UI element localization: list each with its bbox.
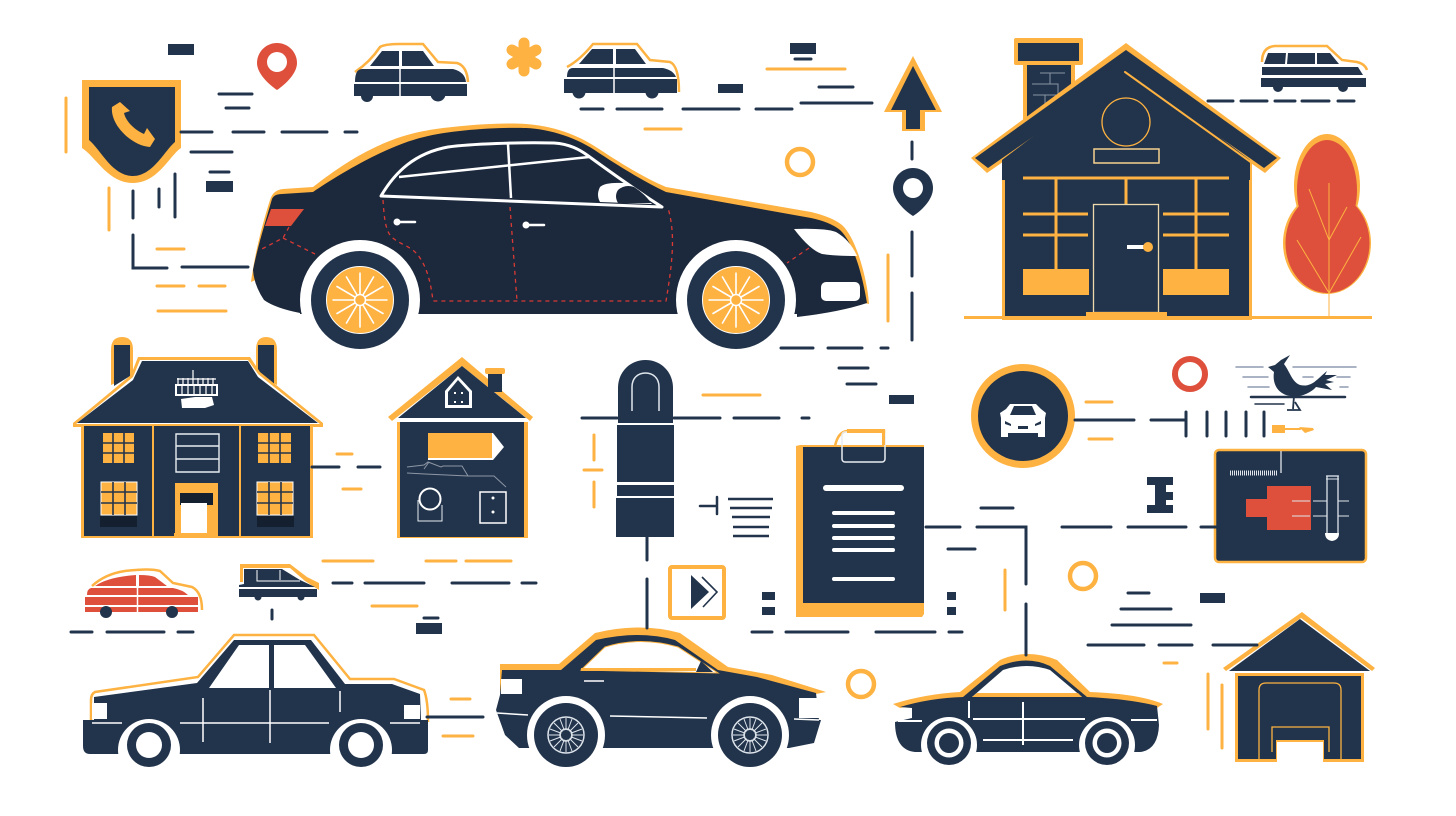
icon: red ring bbox=[1175, 359, 1205, 389]
blueprint panel bbox=[1215, 450, 1366, 562]
wheels bbox=[118, 719, 392, 781]
clipboard bbox=[796, 429, 924, 617]
windshield bbox=[972, 666, 1082, 697]
icon: red location pin bbox=[257, 43, 297, 90]
windows bbox=[209, 645, 336, 688]
icon: letter-like I block bbox=[1147, 477, 1173, 513]
window frame bars bbox=[399, 144, 589, 198]
car roof outline bbox=[251, 123, 869, 304]
door seams bbox=[260, 200, 809, 301]
windows bbox=[581, 642, 718, 673]
wall panel bbox=[480, 492, 506, 523]
windows outline bbox=[381, 143, 662, 207]
pencil bbox=[1327, 476, 1338, 536]
autumn tree bbox=[1283, 134, 1371, 317]
rear wheel bbox=[300, 240, 420, 360]
large house bbox=[964, 38, 1372, 320]
faint outline car bbox=[407, 462, 506, 487]
attic window bbox=[1102, 98, 1150, 146]
small van bbox=[239, 564, 319, 600]
mirror glass bbox=[616, 186, 651, 203]
front view car bbox=[1000, 404, 1046, 437]
orange rings bbox=[848, 563, 1096, 697]
small car: top left bbox=[354, 44, 468, 102]
clipboard text lines bbox=[826, 485, 901, 491]
icon: shield with phone bbox=[82, 80, 181, 183]
side mirror bbox=[598, 183, 652, 204]
bottom left sedan bbox=[83, 635, 428, 781]
ground line bbox=[964, 316, 1372, 319]
garage bbox=[1223, 612, 1375, 762]
roof bbox=[971, 43, 1281, 173]
phone handset bbox=[112, 102, 155, 147]
small van: top right bbox=[1261, 46, 1367, 92]
window frames bbox=[1023, 178, 1229, 270]
bottom centre car bbox=[496, 628, 826, 774]
small car: top centre bbox=[564, 44, 679, 98]
centre window bbox=[176, 434, 219, 472]
fog light bbox=[821, 282, 860, 301]
lights bbox=[501, 679, 522, 694]
icon: list with T connector bbox=[700, 497, 773, 536]
icon: car in circle badge bbox=[971, 364, 1075, 468]
clip bbox=[835, 431, 884, 446]
padlock column bbox=[616, 360, 674, 537]
ruler bbox=[1230, 470, 1278, 476]
walls bbox=[397, 422, 528, 538]
taillight bbox=[265, 209, 304, 226]
roof bbox=[73, 357, 323, 427]
dormer bbox=[445, 376, 472, 408]
navy small rectangles bbox=[168, 43, 1225, 634]
door handles bbox=[397, 222, 544, 225]
small red car bbox=[85, 570, 202, 618]
body lines bbox=[497, 681, 819, 720]
front wheel bbox=[676, 240, 796, 360]
icon: small orange key bbox=[1272, 425, 1314, 433]
headlight bbox=[794, 229, 857, 256]
car body bbox=[253, 128, 867, 317]
wheels bbox=[527, 696, 789, 774]
door bbox=[1094, 204, 1158, 312]
chimneys bbox=[111, 337, 277, 385]
chimney bbox=[1023, 60, 1075, 120]
icon: orange asterisk bbox=[512, 43, 536, 71]
icon: play arrow box bbox=[670, 567, 724, 618]
body lines bbox=[898, 701, 1157, 745]
bottom right car bbox=[893, 654, 1163, 773]
orange accent dashes bbox=[66, 69, 1222, 748]
icon: bird with speed lines bbox=[1236, 355, 1356, 410]
body lines bbox=[92, 690, 420, 743]
navy connector dashes bbox=[71, 59, 1354, 717]
entrance door bbox=[175, 483, 218, 535]
wheels bbox=[921, 717, 1135, 773]
lights bbox=[92, 703, 107, 719]
icon: orange ring bbox=[787, 149, 813, 175]
walls bbox=[81, 424, 313, 538]
red block bbox=[1246, 486, 1311, 530]
main sedan car bbox=[251, 123, 869, 360]
manor house with two chimneys bbox=[73, 337, 323, 538]
small house with orange sign bbox=[388, 357, 533, 538]
house walls bbox=[1002, 70, 1252, 320]
icon: up arrow bbox=[884, 56, 942, 131]
orange sign bbox=[428, 433, 504, 460]
icon: navy location pin bbox=[893, 168, 933, 216]
roof sign bbox=[176, 370, 217, 395]
upper windows bbox=[103, 433, 134, 463]
circle device bbox=[418, 500, 442, 521]
lower windows bbox=[101, 482, 137, 515]
lights bbox=[895, 708, 912, 718]
